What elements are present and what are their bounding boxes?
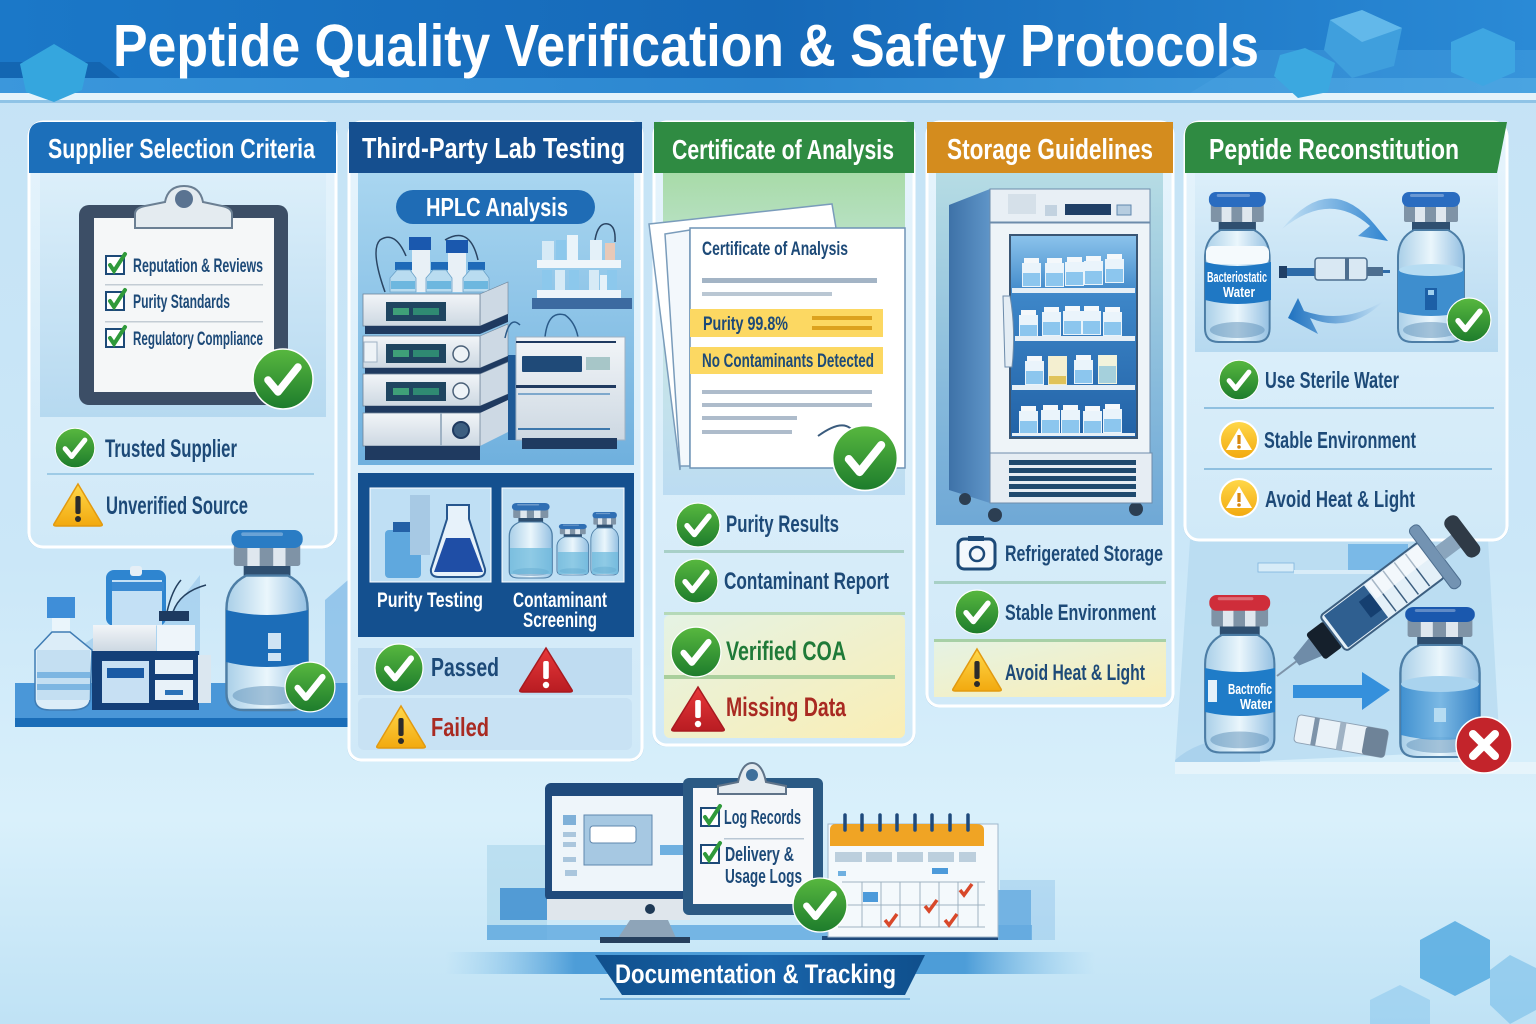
heading: storage [927,122,1173,173]
panel: COA status: Missing Data [726,692,847,722]
icon: blue cap vial [1400,607,1480,757]
row: passed [358,644,632,695]
row: unverified source: Unverified Source [106,492,248,520]
panel: third-party lab testing [348,120,644,762]
illustration: reconstitution vials [1205,192,1491,342]
panel: test thumbnails: Contaminant [513,589,607,612]
illustration: lower vials [1205,595,1512,773]
icon: calendar [822,815,998,940]
ribbon: documentation title: Documentation & Tracking [615,959,896,989]
panel: COA status: Verified COA [726,636,846,666]
row: stable environment: Stable Environment [1005,600,1156,625]
row: avoid heat and light: Avoid Heat & Light [1005,660,1145,685]
row: passed: Passed [431,652,499,682]
panel: test thumbnails: Screening [523,609,597,632]
icon: documentation check [793,878,847,932]
illustration: syringe and vials [1175,540,1536,774]
row: purity results: Purity Results [726,511,839,538]
icon: ampoule [1293,714,1389,758]
shelf rack [595,224,615,242]
panel: test thumbnails: Purity Testing [377,589,483,612]
illustration: HPLC instruments [363,224,632,460]
heading: supplier selection: Supplier Selection Criteria [48,133,315,164]
row: trusted supplier [47,428,314,475]
panel: supplier selection criteria [28,120,338,548]
row: avoid heat and light: Avoid Heat & Light [1265,486,1415,512]
backdrop blocks [445,845,1095,974]
panel: test thumbnails [358,473,634,637]
icon: clipboard checklist: Regulatory Compliance [133,329,263,350]
panel: COA status [664,612,905,738]
panel: storage guidelines [926,120,1174,708]
row: use sterile water [1204,360,1494,409]
row: stable environment [1204,421,1492,470]
heading: lab testing [349,122,642,173]
heading: storage: Storage Guidelines [947,134,1153,166]
header banner [0,0,1536,103]
icon: red cap vial: Bactrofic [1228,681,1272,698]
row: stable environment [934,590,1166,642]
icon: log clipboard [683,763,823,915]
second instrument [505,314,578,338]
icon: header hexagons [20,10,1515,102]
row: trusted supplier: Trusted Supplier [105,435,237,463]
row: contaminant report: Contaminant Report [724,568,889,595]
icon: clipboard checklist: Purity Standards [133,292,230,313]
icon: red cap vial [1205,595,1275,752]
illustration: refrigerator [949,189,1152,522]
icon: red cap vial: Water [1240,696,1272,713]
heading: reconstitution: Peptide Reconstitution [1209,134,1459,166]
row: failed: Failed [431,712,489,742]
icon: log clipboard: Delivery & [725,844,794,866]
bottle [47,597,75,618]
row: stable environment: Stable Environment [1264,427,1416,453]
large vial [226,530,308,710]
icon: syringe [1254,501,1492,706]
heading: reconstitution [1185,122,1507,173]
label: HPLC analysis: HPLC Analysis [426,192,568,222]
panel: certificate of analysis [649,120,916,746]
illustration: reconstitution vials: Water [1223,284,1255,301]
row: refrigerated storage: Refrigerated Storage [1005,541,1163,566]
row: failed [358,698,632,750]
illustration: certificate document [649,204,905,490]
icon: clipboard checklist: Reputation & Reviews [133,256,263,277]
panel: peptide reconstitution [1184,120,1508,542]
illustration: supplier products [15,530,348,727]
illustration: certificate document: Certificate of Analysis [702,239,848,260]
row: avoid heat and light [934,642,1166,697]
icon: computer monitor [545,783,690,943]
section: documentation and tracking [445,763,1095,1000]
icon: red x [1456,717,1512,773]
icon: log clipboard: Usage Logs [725,866,802,888]
row: contaminant report [674,559,889,603]
illustration: reconstitution vials: Bacteriostatic [1207,269,1267,286]
illustration: certificate document: No Contaminants Detected [702,351,874,372]
heading: supplier selection [29,122,336,173]
heading: lab testing: Third-Party Lab Testing [362,133,625,165]
row: purity results [664,503,904,553]
instrument [106,570,166,626]
icon: clipboard checklist [79,186,313,409]
row: use sterile water: Use Sterile Water [1265,367,1399,393]
row: avoid heat and light [1220,479,1415,517]
row: refrigerated storage [934,536,1166,584]
heading: certificate: Certificate of Analysis [672,134,894,165]
illustration: certificate document: Purity 99.8% [703,314,788,335]
icon: log clipboard: Log Records [724,807,801,829]
ribbon: documentation title [595,955,925,1000]
heading: certificate [654,122,914,173]
row: unverified source [54,484,248,526]
decoration: corner hexagons [1370,921,1536,1024]
arrow [1293,672,1390,710]
title: Peptide Quality Verification & Safety Protocols [113,13,1259,79]
